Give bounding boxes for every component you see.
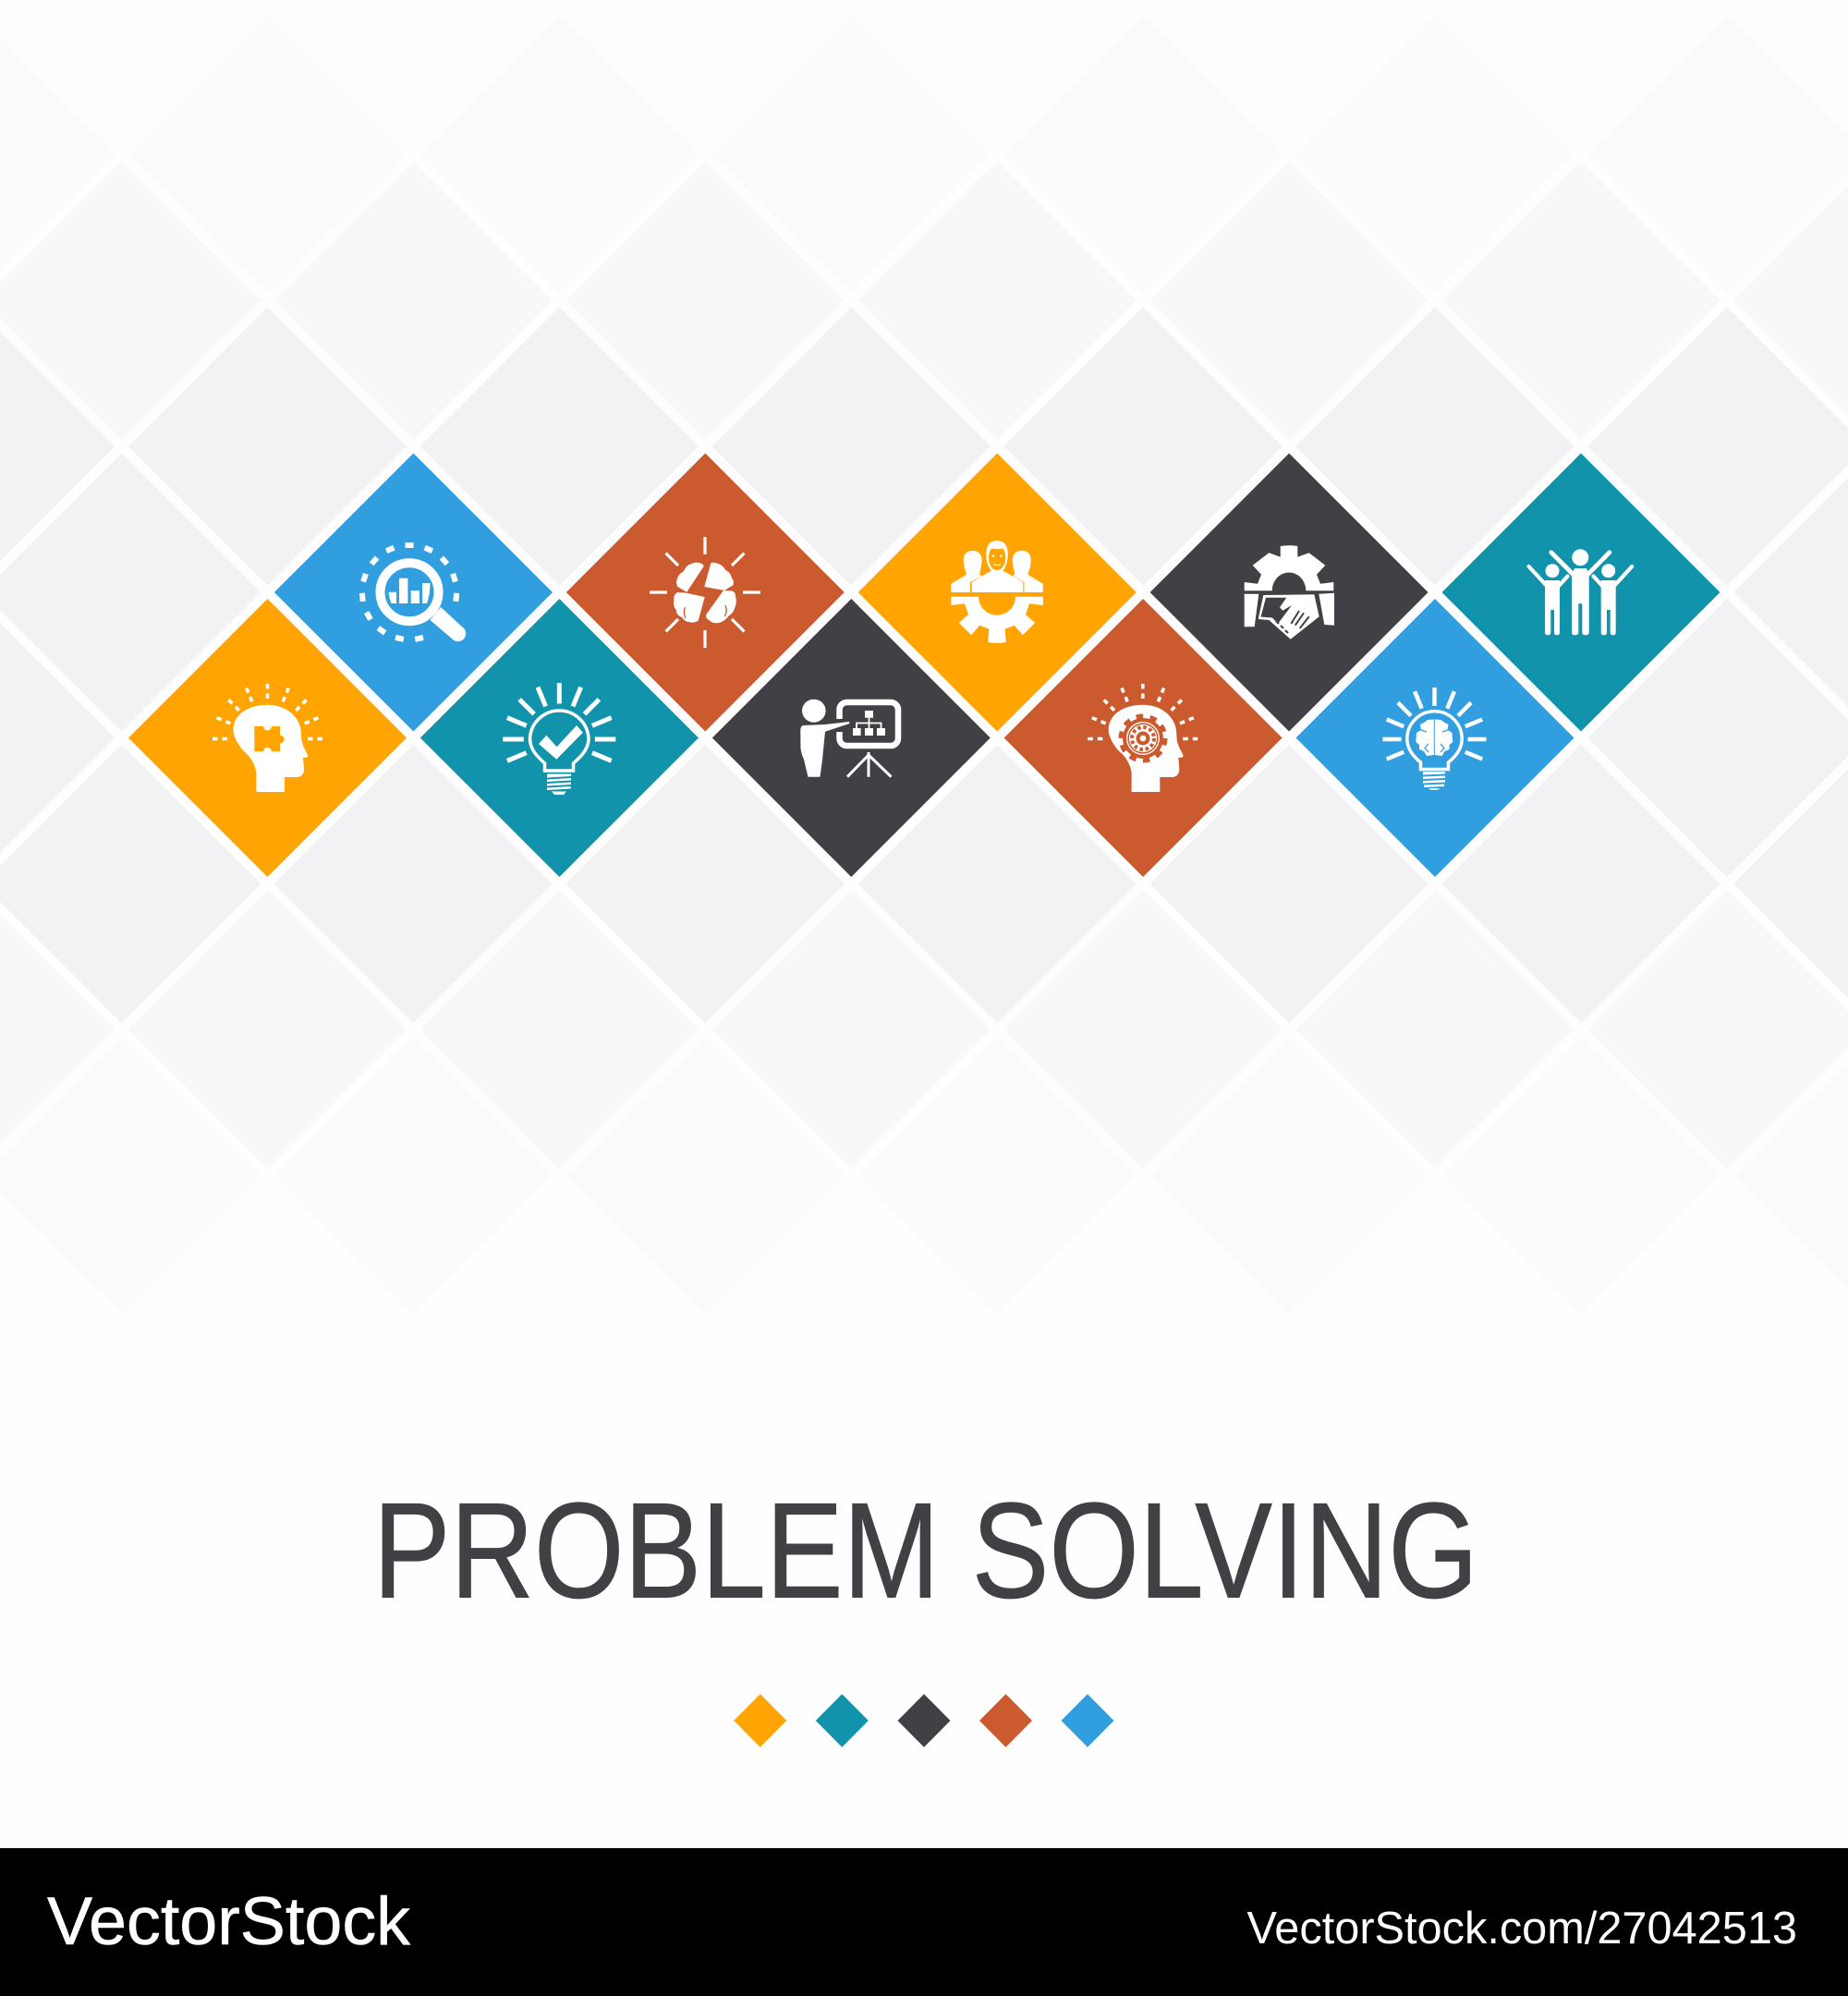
panel: teal diamond, bulb with check [420, 599, 699, 877]
panel: orange diamond, team with gear [858, 453, 1137, 732]
icon: brain with lightning bolt [650, 537, 760, 648]
icon: head with gear [1088, 684, 1198, 792]
icon: light bulb with check mark [503, 683, 615, 795]
panel: blue diamond, magnifier with chart [274, 453, 553, 732]
panel: red diamond, brain with lightning [566, 453, 845, 732]
panel: dark diamond, presenter at board [712, 599, 991, 877]
panel: blue diamond, bulb with brain [1295, 599, 1574, 877]
icon: handshake under gear [1245, 545, 1334, 639]
icon: light bulb with brain [1382, 688, 1486, 790]
footer brand: VectorStock [47, 1884, 410, 1959]
colour legend diamonds [734, 1694, 1114, 1747]
panel: dark diamond, handshake with gear [1150, 453, 1429, 732]
icon: presenter with org chart board [800, 700, 898, 777]
footer url: VectorStock.com/27042513 [1247, 1903, 1797, 1953]
icon: head with puzzle piece [213, 684, 322, 792]
panel: red diamond, head with gear [1004, 599, 1283, 877]
icon: team above gear [951, 541, 1043, 643]
panel: orange diamond, head with puzzle [128, 599, 407, 877]
background diamond lattice [0, 15, 1848, 1315]
icon: three people with raised arms [1528, 549, 1632, 635]
panel: teal diamond, three people [1441, 453, 1720, 732]
icon: magnifying glass with bars [359, 542, 466, 642]
footer band [0, 1848, 1848, 1996]
title: PROBLEM SOLVING [373, 1475, 1478, 1626]
